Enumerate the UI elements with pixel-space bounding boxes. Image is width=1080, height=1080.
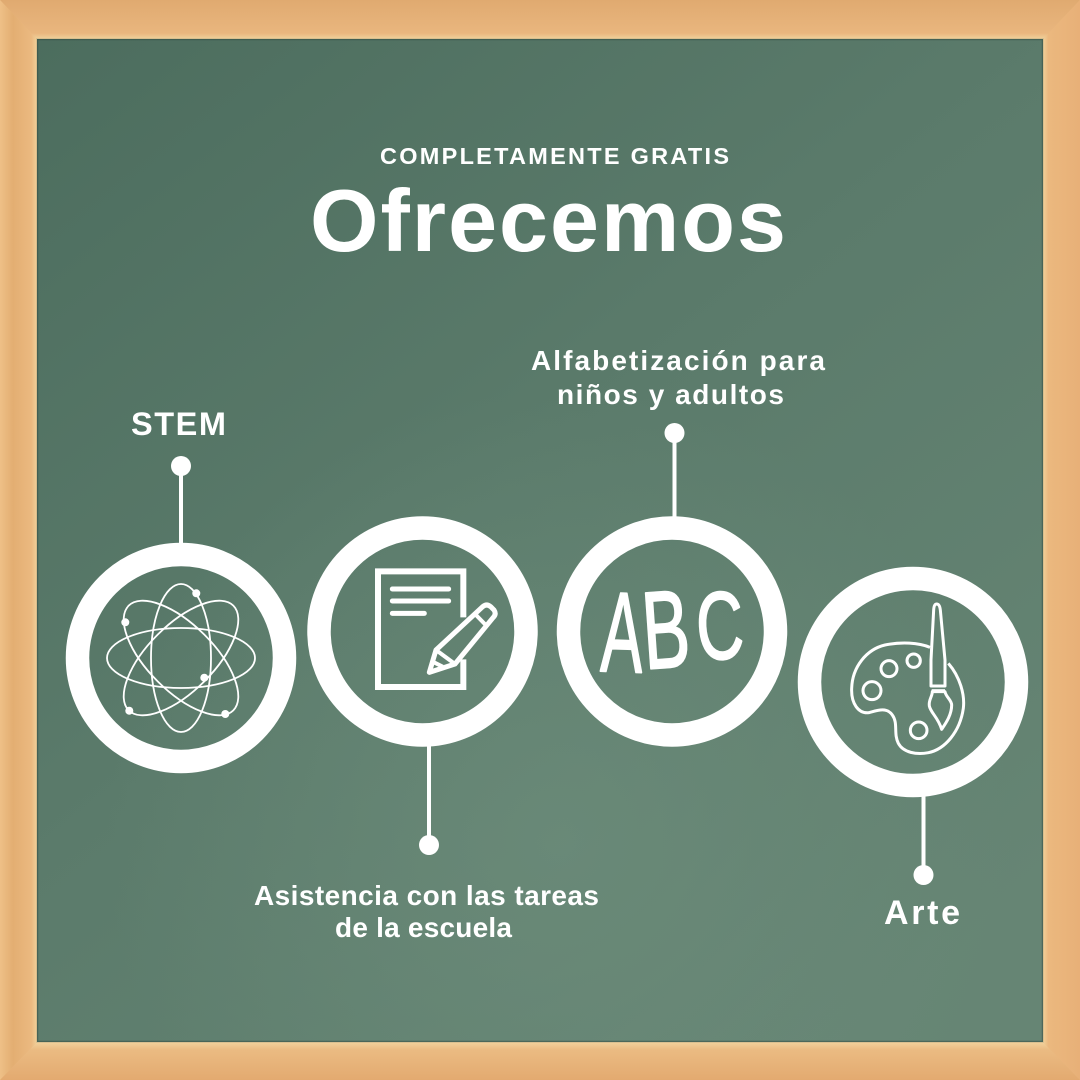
label: homework: de la escuela	[335, 912, 512, 943]
label: STEM: STEM	[131, 406, 226, 442]
label: literacy: Alfabetización para	[531, 345, 825, 376]
label: homework	[254, 880, 599, 943]
subtitle: COMPLETAMENTE GRATIS	[380, 143, 729, 169]
title: Ofrecemos	[310, 171, 786, 270]
item: literacy	[531, 345, 825, 735]
ring: literacy	[568, 528, 776, 735]
icon: atom	[105, 582, 257, 734]
ring: STEM	[78, 554, 284, 762]
label: literacy: niños y adultos	[557, 379, 784, 410]
icon: ABC letters: A	[599, 569, 646, 697]
connector: homework	[419, 745, 439, 855]
ring: homework	[319, 528, 526, 735]
label: homework: Asistencia con las tareas	[254, 880, 599, 911]
connector: art	[914, 795, 934, 885]
icon: palette and brush	[852, 604, 964, 754]
icon: document and pencil	[378, 571, 495, 687]
ring: art	[810, 578, 1016, 786]
connector: literacy	[664, 423, 684, 519]
icon: ABC letters: C	[694, 572, 746, 681]
item: STEM	[78, 406, 284, 762]
icon: ABC letters: B	[638, 566, 694, 693]
connector: STEM	[171, 456, 191, 548]
label: literacy	[531, 345, 825, 410]
label: art: Arte	[884, 894, 960, 932]
icon: ABC letters	[599, 566, 746, 697]
item: art	[810, 578, 1016, 932]
item: homework help	[254, 528, 599, 943]
